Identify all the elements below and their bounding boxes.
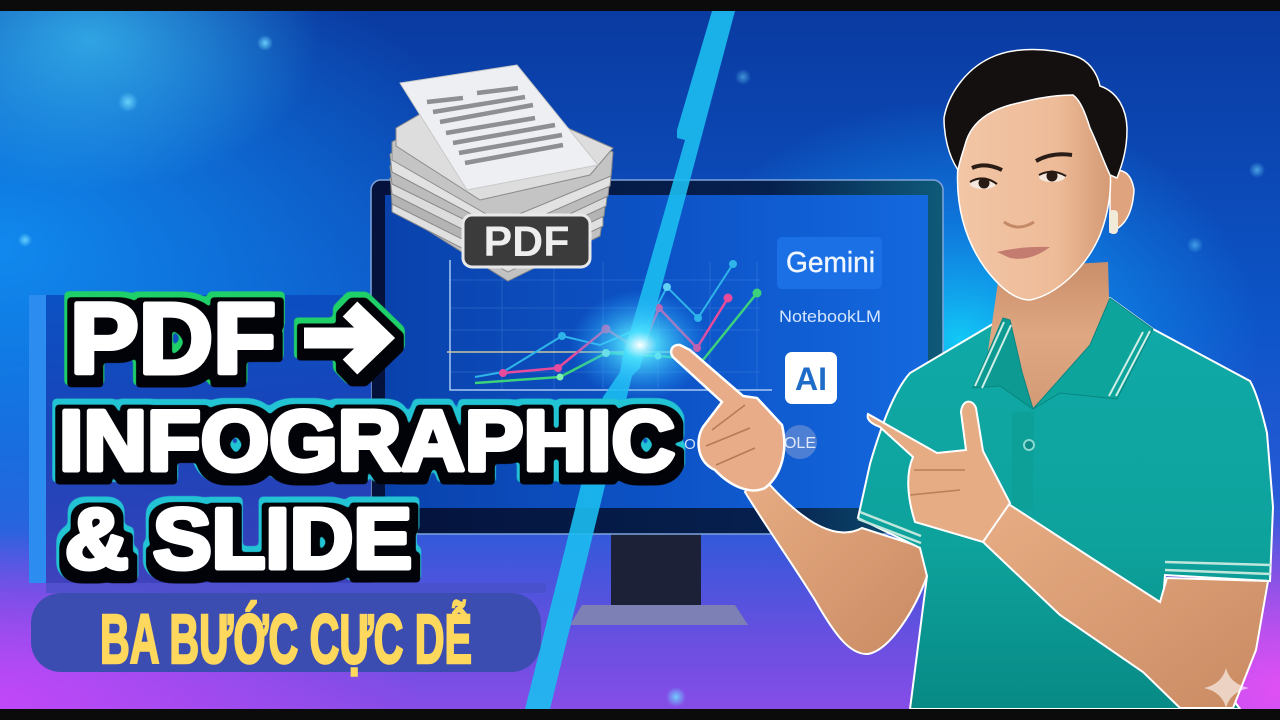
title: PDF arrow: PDF (70, 283, 276, 395)
PDF label (463, 215, 590, 267)
left cuff stripes (858, 512, 921, 543)
series pink (499, 294, 732, 377)
OLE circle (783, 425, 817, 459)
lower sheets (390, 85, 613, 281)
nose (1004, 222, 1034, 227)
AI badge: AI (795, 361, 827, 397)
head (944, 50, 1134, 300)
pointing hand on chest (868, 402, 1010, 542)
eyebrows (972, 154, 1072, 170)
title: PDF arrow (70, 283, 380, 395)
neck (985, 262, 1110, 408)
eyes (970, 170, 1066, 189)
light beam divider (525, 11, 735, 709)
chart glow (570, 290, 710, 400)
subtitle pill (31, 593, 541, 678)
placket and button (1012, 412, 1034, 510)
title: and SLIDE: & SLIDE (65, 492, 412, 587)
partial IO label: IO (680, 436, 696, 453)
monitor bezel (371, 180, 943, 534)
person (671, 50, 1273, 709)
monitor stand (611, 532, 701, 606)
collar (973, 298, 1153, 409)
OLE circle: OLE (784, 435, 816, 452)
sparkle watermark (1204, 668, 1249, 708)
title: INFOGRAPHIC: INFOGRAPHIC (59, 394, 675, 489)
viewer-right arm (983, 503, 1268, 708)
AI badge (785, 352, 837, 404)
subtitle pill: BA BƯỚC CỰC DỄ (100, 599, 472, 678)
monitor (371, 180, 943, 625)
right cuff stripes (1165, 562, 1271, 574)
PDF label: PDF (484, 218, 570, 266)
ear and earbud (1110, 170, 1134, 232)
monitor base (570, 605, 748, 625)
line chart (447, 260, 772, 390)
Gemini badge: Gemini (786, 247, 875, 279)
viewer-left arm and pointing hand (671, 345, 927, 654)
monitor screen (385, 195, 928, 508)
left accent panel (29, 295, 546, 593)
hair (944, 50, 1127, 178)
mouth (997, 247, 1050, 259)
series green (475, 288, 762, 383)
PDF paper stack icon (390, 65, 613, 281)
NotebookLM label: NotebookLM (779, 307, 881, 326)
top sheet (400, 65, 598, 190)
icon: arrow (304, 309, 380, 367)
polo shirt (858, 298, 1273, 709)
Gemini badge (777, 237, 882, 289)
face (957, 94, 1111, 300)
text lines on sheet (427, 88, 563, 163)
series blue (475, 260, 737, 377)
